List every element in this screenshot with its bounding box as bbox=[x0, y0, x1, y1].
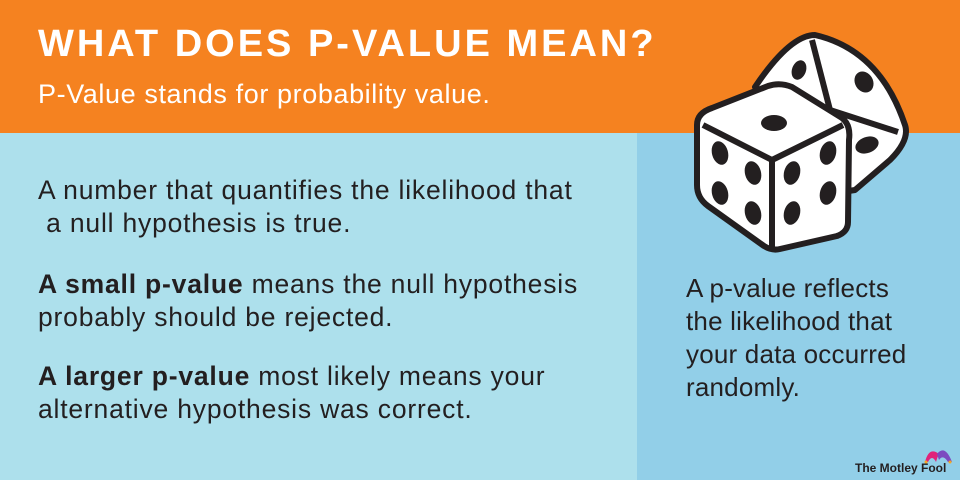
text: definition bbox=[38, 175, 573, 238]
header band bbox=[0, 0, 960, 133]
right panel bbox=[637, 133, 960, 480]
text: callout right bbox=[686, 273, 906, 402]
text: larger p-value bbox=[38, 361, 545, 424]
text: larger p-value: alternative hypothesis was correct. bbox=[38, 394, 473, 424]
text: larger p-value: A larger p-value most likely means your bbox=[38, 361, 545, 391]
text: callout right: A p-value reflects bbox=[686, 273, 889, 303]
title: WHAT DOES P-VALUE MEAN? bbox=[38, 23, 657, 65]
text: small p-value bbox=[38, 269, 578, 332]
subtitle: P-Value stands for probability value. bbox=[38, 79, 490, 109]
text: callout right: your data occurred bbox=[686, 339, 906, 369]
logo: The Motley Fool: The Motley Fool bbox=[855, 461, 946, 475]
text: callout right: the likelihood that bbox=[686, 306, 892, 336]
text: small p-value: A small p-value means the null hypothesis bbox=[38, 269, 578, 299]
text: definition: a null hypothesis is true. bbox=[46, 208, 351, 238]
text: callout right: randomly. bbox=[686, 372, 800, 402]
logo: The Motley Fool bbox=[855, 450, 952, 475]
text: definition: A number that quantifies the likelihood that bbox=[38, 175, 573, 205]
text: small p-value: probably should be rejected. bbox=[38, 302, 393, 332]
